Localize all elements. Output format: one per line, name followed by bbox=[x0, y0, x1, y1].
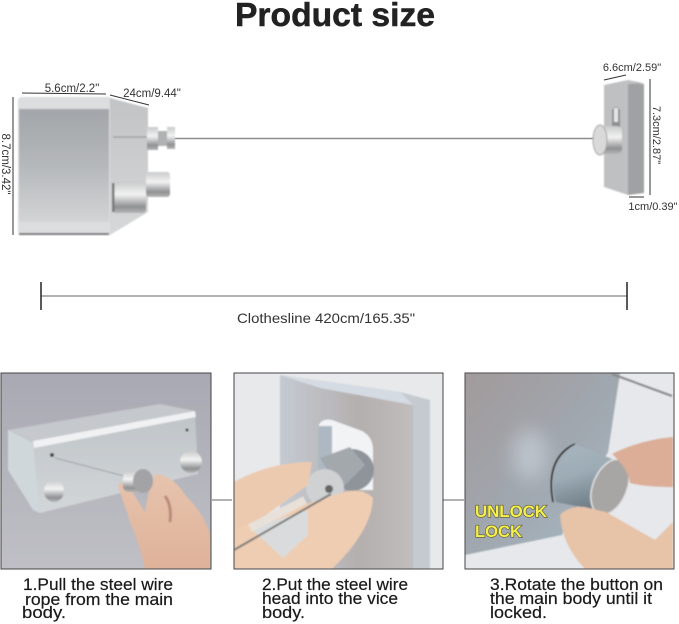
main body front panel bbox=[19, 109, 109, 222]
dimension plate height bbox=[650, 79, 662, 195]
main body front face bbox=[18, 97, 110, 235]
plate highlight bbox=[512, 429, 548, 481]
dimension height 8.7cm bbox=[0, 97, 13, 235]
plate bbox=[280, 375, 430, 569]
caption 3: locked. bbox=[490, 604, 547, 622]
unlock lock labels: LOCK bbox=[475, 522, 523, 541]
caption 1 bbox=[22, 576, 173, 622]
wire clamp bbox=[147, 127, 175, 150]
dimension plate width bbox=[603, 62, 661, 80]
dimension width 5.6cm: 5.6cm/2.2" bbox=[45, 83, 99, 95]
wire bbox=[234, 494, 331, 550]
unlock lock labels: UNLOCK bbox=[475, 502, 548, 521]
knob cylinder bbox=[552, 444, 612, 510]
caption 2: body. bbox=[262, 604, 305, 622]
dimension depth 24cm bbox=[110, 88, 181, 105]
plate knob bbox=[593, 125, 622, 155]
caption 2: head into the vice bbox=[262, 590, 398, 608]
panel 3 photo bbox=[465, 373, 674, 569]
slot bbox=[318, 420, 373, 490]
clothesline wire bbox=[170, 138, 600, 140]
unlock lock labels bbox=[475, 502, 548, 541]
main body side face bbox=[110, 98, 148, 235]
hand bbox=[234, 462, 312, 532]
panel 1 photo bbox=[1, 373, 211, 569]
wall plate product bbox=[593, 80, 644, 195]
caption 1: rope from the main bbox=[25, 591, 173, 609]
caption 3: 3.Rotate the button on bbox=[490, 576, 663, 594]
plate front face bbox=[604, 80, 644, 195]
rear knob bbox=[146, 172, 170, 197]
caption 3 bbox=[490, 576, 663, 622]
knob left bbox=[44, 480, 64, 502]
panel 2 photo bbox=[234, 373, 443, 569]
dimension plate height: 7.3cm/2.87" bbox=[650, 106, 662, 164]
caption 3: the main body until it bbox=[490, 590, 652, 608]
front knob bbox=[113, 182, 146, 213]
plate side face bbox=[628, 82, 644, 195]
caption 2: 2.Put the steel wire bbox=[262, 576, 408, 594]
gap between fingers bbox=[250, 510, 308, 558]
plate bbox=[465, 373, 620, 555]
fingers bbox=[612, 437, 673, 487]
dimension plate width: 6.6cm/2.59" bbox=[603, 62, 661, 74]
pull knob bbox=[123, 469, 153, 493]
dimension depth 24cm: 24cm/9.44" bbox=[123, 88, 181, 100]
dimension width 5.6cm bbox=[22, 83, 106, 95]
connector lines between panels bbox=[212, 499, 464, 501]
caption 2 bbox=[262, 576, 408, 622]
knob right bbox=[180, 451, 202, 473]
plate slot bbox=[612, 107, 620, 150]
caption 1: body. bbox=[22, 604, 66, 622]
clothesline dimension: Clothesline 420cm/165.35" bbox=[237, 310, 415, 326]
caption 1: 1.Pull the steel wire bbox=[23, 576, 173, 594]
dimension plate thickness: 1cm/0.39" bbox=[628, 201, 678, 213]
lock head bbox=[306, 447, 374, 507]
hand bbox=[118, 474, 210, 569]
rail body bbox=[8, 404, 198, 513]
main body product bbox=[18, 97, 175, 235]
